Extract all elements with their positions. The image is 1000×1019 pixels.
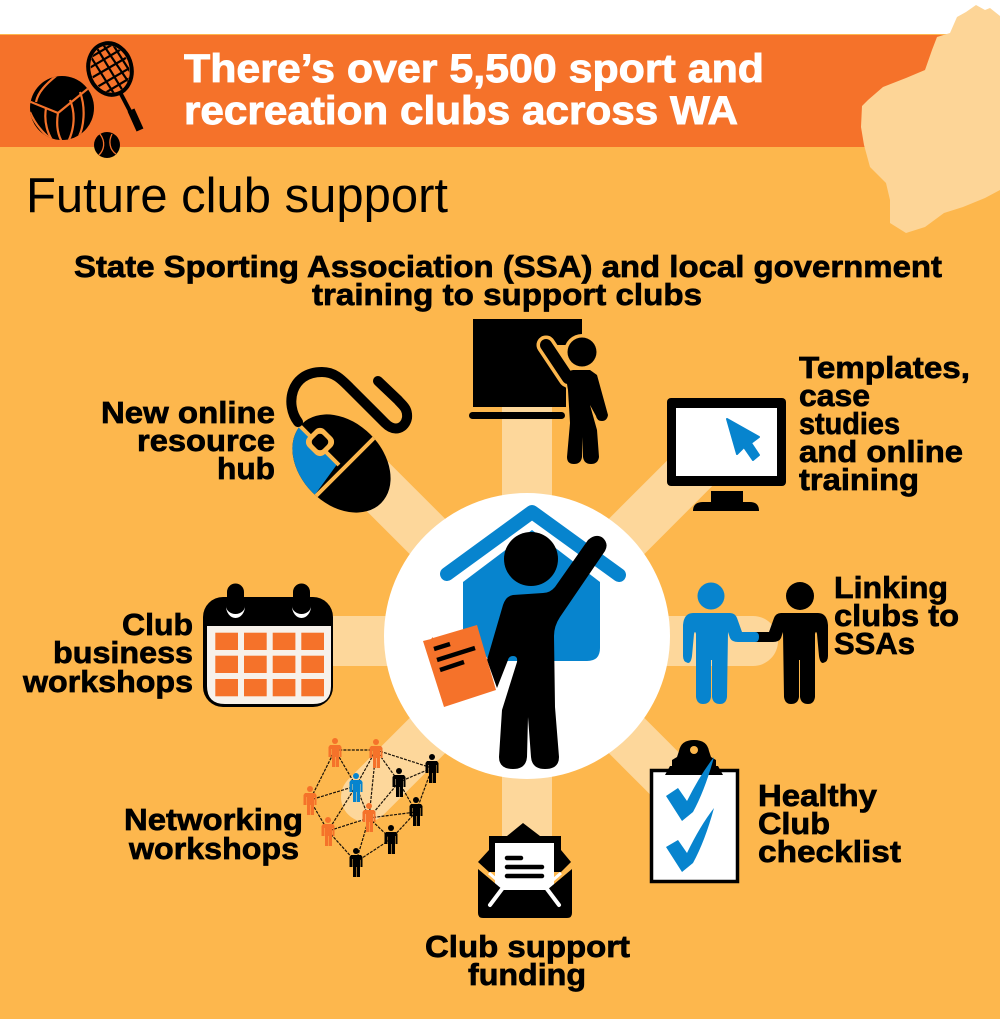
icon: tennis ball bbox=[94, 132, 120, 158]
label: Networking workshops bbox=[124, 802, 303, 866]
label: Club business workshops bbox=[22, 607, 193, 699]
icon: person at clubhouse with document bbox=[423, 512, 619, 769]
icon: sports equipment bbox=[26, 39, 140, 158]
banner title: recreation clubs across WA bbox=[184, 89, 738, 133]
document bbox=[423, 625, 496, 707]
hub spokes bbox=[333, 405, 753, 838]
label: New online resource hub: New online bbox=[101, 395, 275, 430]
label: Templates, case studies and online training: Templates, bbox=[799, 350, 970, 385]
black person bbox=[751, 582, 828, 704]
subheading: State Sporting Association (SSA) and local government bbox=[74, 249, 942, 284]
icon: calendar bbox=[203, 584, 333, 707]
blue person bbox=[683, 582, 759, 704]
label: Club business workshops: workshops bbox=[22, 664, 193, 699]
label: New online resource hub bbox=[101, 395, 275, 486]
clubhouse bbox=[447, 512, 619, 661]
label: Club support funding: Club support bbox=[425, 929, 630, 964]
icon: teacher at board bbox=[469, 319, 610, 464]
label: Club business workshops: Club bbox=[122, 607, 193, 642]
label: Networking workshops: workshops bbox=[128, 831, 299, 866]
banner title: There’s over 5,500 sport and bbox=[184, 47, 764, 91]
label: Club business workshops: business bbox=[53, 635, 193, 670]
label: Templates, case studies and online training bbox=[799, 350, 970, 497]
center circle bbox=[384, 493, 670, 779]
icon: handshake bbox=[683, 582, 828, 704]
label: Healthy Club checklist bbox=[758, 778, 901, 869]
icon: volleyball bbox=[30, 76, 94, 140]
label: Networking workshops: Networking bbox=[124, 802, 303, 837]
icon: clipboard checklist bbox=[652, 740, 738, 882]
label: Linking clubs to SSAs: Linking bbox=[834, 570, 948, 605]
label: Club support funding bbox=[425, 929, 630, 992]
icon: computer mouse bbox=[286, 367, 412, 513]
label: Linking clubs to SSAs: SSAs bbox=[834, 626, 915, 661]
heading: Future club support: Future club support bbox=[26, 169, 448, 223]
label: Healthy Club checklist: checklist bbox=[758, 834, 901, 869]
icon: envelope with letter bbox=[478, 823, 572, 918]
label: Linking clubs to SSAs: clubs to bbox=[834, 598, 959, 633]
header banner bbox=[0, 35, 1000, 147]
cursor bbox=[727, 419, 759, 460]
label: Club support funding: funding bbox=[468, 957, 586, 992]
person bbox=[487, 532, 607, 769]
label: Healthy Club checklist: Healthy bbox=[758, 778, 878, 813]
label: New online resource hub: hub bbox=[217, 451, 275, 486]
icon: people network bbox=[304, 738, 438, 877]
subheading bbox=[74, 249, 942, 312]
label: New online resource hub: resource bbox=[137, 423, 275, 458]
icon: computer monitor bbox=[667, 398, 786, 511]
subheading: training to support clubs bbox=[312, 277, 702, 312]
label: Templates, case studies and online training: studies bbox=[799, 406, 900, 441]
icon: tennis racket bbox=[83, 39, 140, 130]
label: Linking clubs to SSAs bbox=[834, 570, 959, 661]
banner title bbox=[184, 47, 764, 133]
label: Templates, case studies and online training: and online bbox=[799, 434, 963, 469]
label: Templates, case studies and online training: case bbox=[799, 378, 870, 413]
map of Western Australia bbox=[861, 5, 1000, 233]
label: Templates, case studies and online training: training bbox=[799, 462, 919, 497]
label: Healthy Club checklist: Club bbox=[758, 806, 830, 841]
